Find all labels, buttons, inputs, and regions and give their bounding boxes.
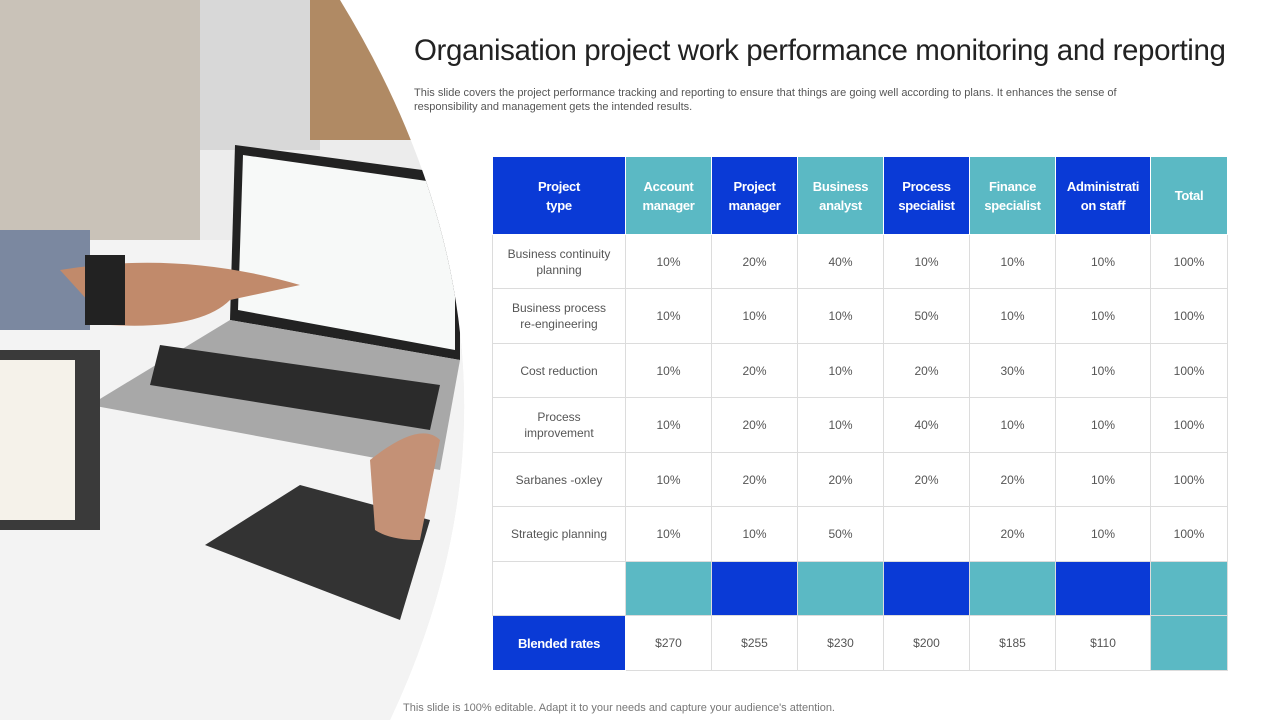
table: project performance: 20%: [828, 472, 853, 486]
table: project performance: 20%: [742, 472, 767, 486]
table: project performance: 100%: [1174, 472, 1204, 486]
table: project performance: 10%: [656, 527, 681, 541]
table: project performance: Business continuity: [508, 246, 610, 260]
table: project performance: 50%: [914, 309, 939, 323]
table: project performance: Cost reduction: [520, 364, 598, 378]
title: Organisation project work performance monitoring and reporting: [414, 34, 1225, 67]
table: project performance: 10%: [656, 309, 681, 323]
table: project performance: 40%: [914, 418, 939, 432]
table: project performance: 10%: [742, 309, 767, 323]
table: project performance: [492, 157, 1228, 671]
table: project performance: 40%: [828, 254, 853, 268]
table: project performance: improvement: [524, 426, 594, 440]
table: project performance: 10%: [1091, 364, 1115, 378]
table: project performance: 10%: [656, 418, 681, 432]
table: project performance: 50%: [828, 527, 853, 541]
table: project performance: Account: [644, 178, 693, 194]
table: project performance: $255: [741, 636, 768, 650]
table: project performance: 10%: [656, 364, 681, 378]
table: project performance: 10%: [914, 254, 939, 268]
table: project performance: 20%: [914, 472, 939, 486]
table: project performance: manager: [642, 198, 695, 212]
table: project performance: Strategic planning: [511, 527, 607, 541]
table: project performance: Total: [1175, 188, 1203, 203]
table: project performance: re-engineering: [520, 317, 598, 331]
table: project performance: $230: [827, 636, 854, 650]
table: project performance: Administrati: [1067, 178, 1139, 194]
footer note: This slide is 100% editable. Adapt it to your needs and capture your audience's attention.: [403, 702, 835, 714]
table: project performance: Process: [902, 178, 951, 194]
table: project performance: Business: [813, 178, 868, 194]
table: project performance: 10%: [828, 364, 853, 378]
table: project performance: 10%: [1091, 527, 1115, 541]
description: This slide covers the project performance tracking and reporting to ensure that things are going well according to plans. It enhances the sense of responsibility and management gets the intended results.: [414, 87, 1117, 113]
table: project performance: 10%: [1091, 309, 1115, 323]
table: project performance: Business process: [512, 301, 606, 315]
table: project performance: specialist: [984, 198, 1041, 212]
table: project performance: $200: [913, 636, 940, 650]
table: project performance: 10%: [1000, 418, 1025, 432]
photo: laptop and hands: [0, 0, 464, 720]
table: project performance: 10%: [656, 472, 681, 486]
table: project performance: 10%: [1091, 472, 1115, 486]
table: project performance: Project: [538, 178, 580, 194]
table: project performance: 100%: [1174, 254, 1204, 268]
table: project performance: 10%: [656, 254, 681, 268]
table: project performance: 20%: [742, 418, 767, 432]
table: project performance: 10%: [1091, 254, 1115, 268]
table: project performance: $185: [999, 636, 1026, 650]
table: project performance: 100%: [1174, 364, 1204, 378]
table: project performance: Sarbanes -oxley: [516, 472, 602, 486]
table: project performance: 20%: [742, 364, 767, 378]
table: project performance: 30%: [1000, 364, 1025, 378]
table: project performance: 10%: [742, 527, 767, 541]
table: project performance: 20%: [914, 364, 939, 378]
table: project performance: $270: [655, 636, 682, 650]
table: project performance: 100%: [1174, 309, 1204, 323]
table: project performance: planning: [536, 262, 582, 276]
table: project performance: manager: [728, 198, 781, 212]
table: project performance: 10%: [1091, 418, 1115, 432]
table: project performance: 10%: [1000, 254, 1025, 268]
table: project performance: Project: [734, 178, 775, 194]
table: project performance: on staff: [1081, 198, 1125, 212]
table: project performance: 100%: [1174, 418, 1204, 432]
table: project performance: 20%: [1000, 527, 1025, 541]
table: project performance: 10%: [828, 418, 853, 432]
table: project performance: 20%: [1000, 472, 1025, 486]
table: project performance: 10%: [828, 309, 853, 323]
table: project performance: specialist: [898, 198, 955, 212]
table: project performance: Blended rates: [518, 636, 600, 650]
table: project performance: type: [546, 198, 572, 212]
table: project performance: Finance: [989, 178, 1036, 194]
table: project performance: $110: [1090, 636, 1116, 650]
table: project performance: 10%: [1000, 309, 1025, 323]
table: project performance: 100%: [1174, 527, 1204, 541]
table: project performance: analyst: [819, 198, 862, 212]
table: project performance: Process: [537, 410, 581, 424]
table: project performance: 20%: [742, 254, 767, 268]
